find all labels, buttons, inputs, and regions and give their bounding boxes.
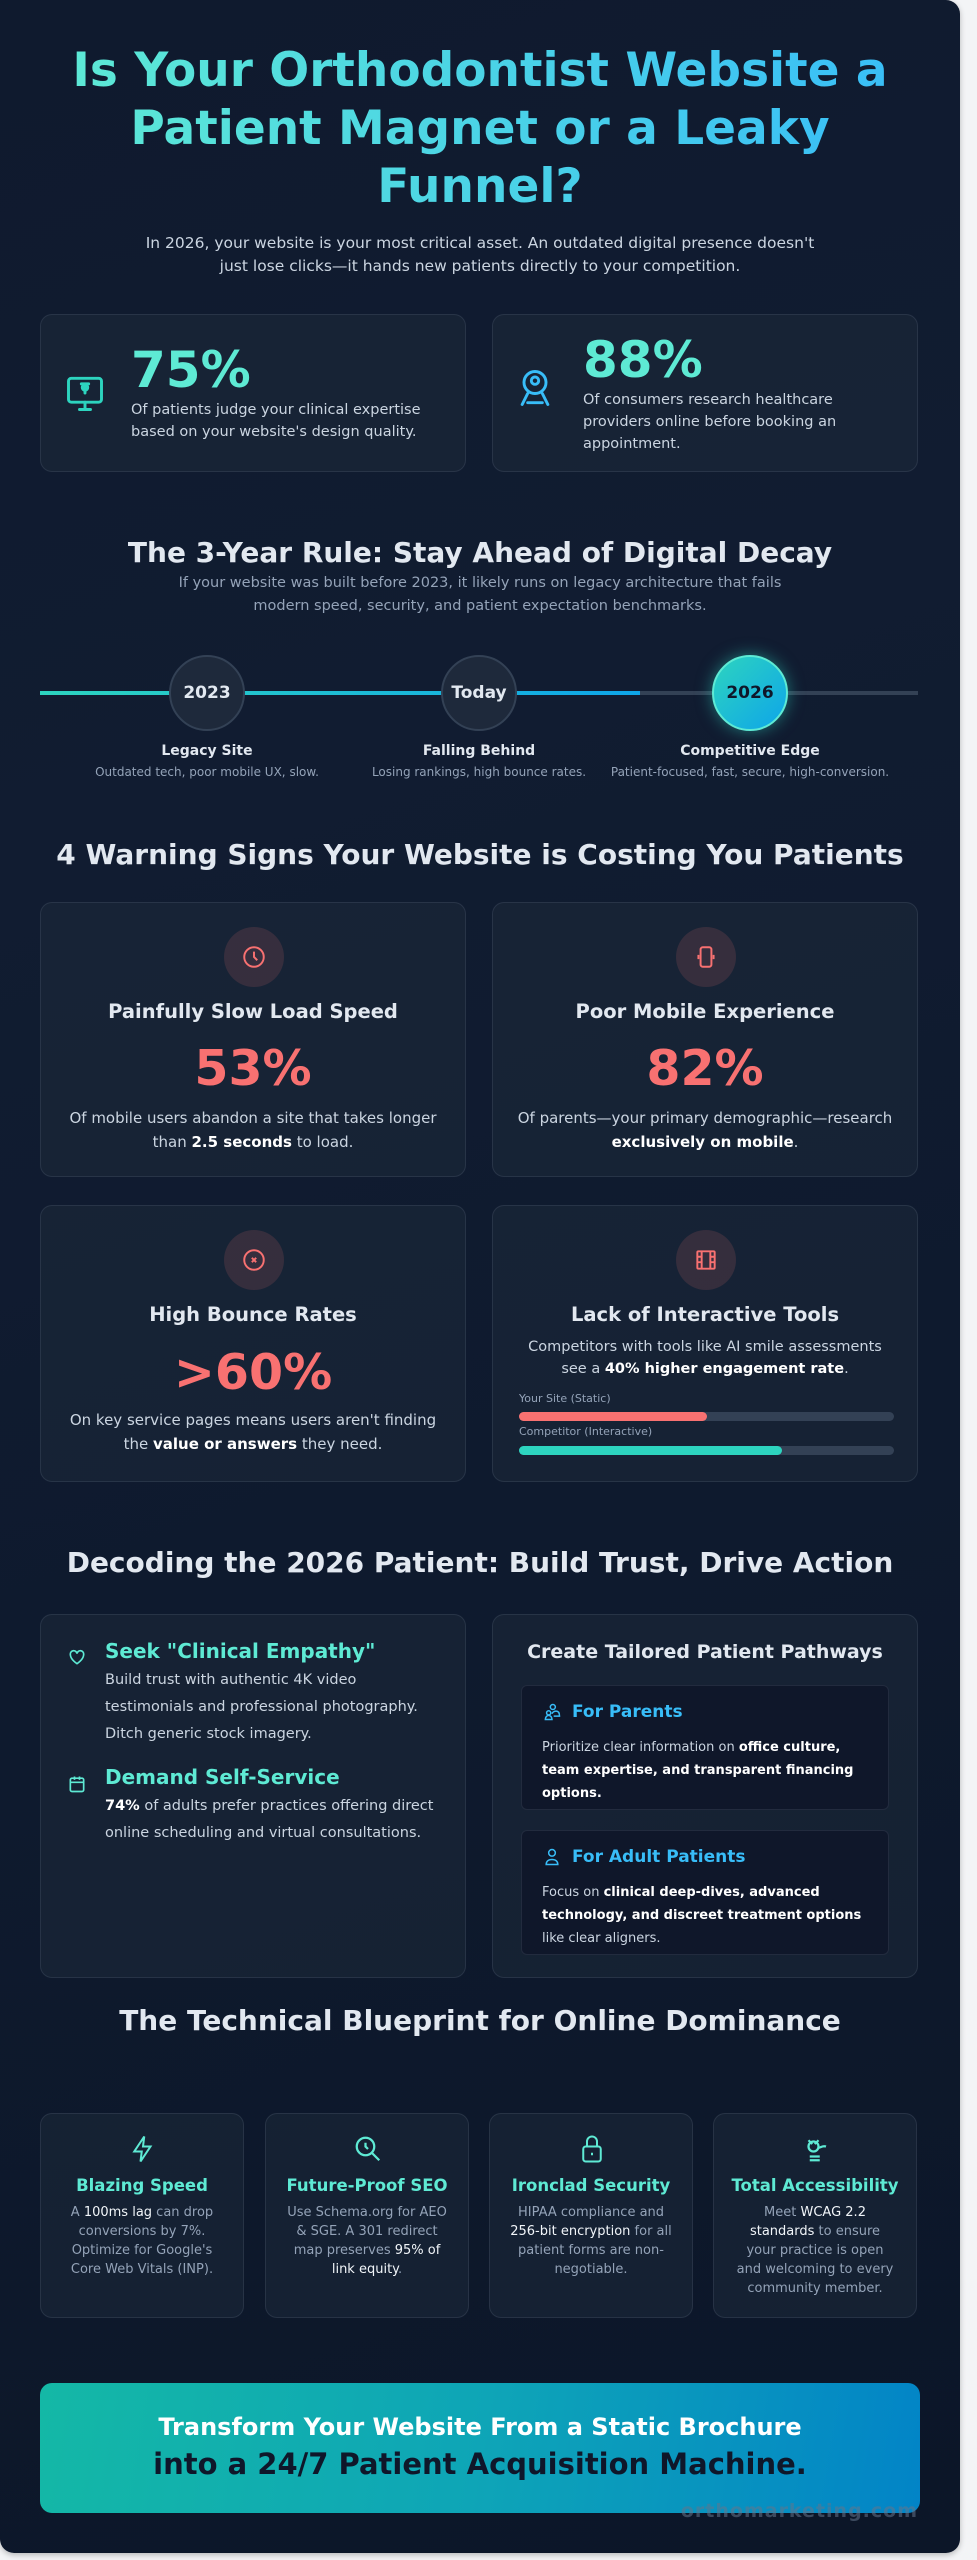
bar chart: Your Site (Static) xyxy=(519,1392,611,1405)
panel: pathways xyxy=(492,1614,918,1978)
clinical empathy: Seek "Clinical Empathy" xyxy=(105,1639,375,1663)
card: accessibility: Meet WCAG 2.2 standards to ensure your practice is open and welcoming to every community member. xyxy=(737,2205,893,2296)
stat text: 88% xyxy=(583,331,703,389)
stat text xyxy=(583,331,836,452)
label legacy xyxy=(95,743,319,779)
card: seo xyxy=(265,2113,469,2318)
clinical empathy: Build trust with authentic 4K video testimonials and professional photography. Ditch generic stock imagery. xyxy=(105,1672,418,1742)
subtitle: In 2026, your website is your most critical asset. An outdated digital presence doesn't just lose clicks—it hands new patients directly to your competition. xyxy=(146,234,814,275)
card: slow load xyxy=(40,902,466,1177)
for parents: Prioritize clear information on office culture, team expertise, and transparent financing options. xyxy=(542,1740,854,1801)
stat text: Of patients judge your clinical expertise based on your website's design quality. xyxy=(131,402,421,440)
heading: decoding: Decoding the 2026 Patient: Build Trust, Drive Action xyxy=(67,1546,893,1579)
panel: pathways: Create Tailored Patient Pathways xyxy=(527,1641,883,1663)
label falling: Losing rankings, high bounce rates. xyxy=(372,765,586,779)
card: accessibility: Total Accessibility xyxy=(731,2176,899,2195)
icon: monitor xyxy=(67,376,103,411)
card: speed xyxy=(40,2113,244,2318)
label falling: Falling Behind xyxy=(423,743,535,759)
icon: lock xyxy=(582,2136,602,2162)
card: slow load: 53% xyxy=(194,1040,312,1097)
for adults xyxy=(521,1830,889,1955)
self-service: 74% of adults prefer practices offering direct online scheduling and virtual consultations. xyxy=(105,1798,433,1841)
heading: warning signs: 4 Warning Signs Your Website is Costing You Patients xyxy=(56,838,904,871)
icon: clock xyxy=(224,927,284,987)
bar chart: Competitor (Interactive) xyxy=(519,1425,652,1438)
stat text: 75% xyxy=(131,341,251,399)
title: Is Your Orthodontist Website a Patient Magnet or a Leaky Funnel? xyxy=(72,43,888,214)
card: seo: Use Schema.org for AEO & SGE. A 301 redirect map preserves 95% of link equity. xyxy=(287,2205,447,2277)
card: bounce xyxy=(40,1205,466,1482)
heading: blueprint: The Technical Blueprint for Online Dominance xyxy=(119,2004,841,2037)
icon: film xyxy=(676,1230,736,1290)
text: 3-year rule: If your website was built before 2023, it likely runs on legacy architecture that fails modern speed, security, and patient expectation benchmarks. xyxy=(179,575,781,614)
node 2026: 2026 xyxy=(726,683,774,703)
node 2023: 2023 xyxy=(183,683,231,703)
cta banner xyxy=(40,2383,920,2513)
bar chart xyxy=(519,1392,894,1455)
card: speed: A 100ms lag can drop conversions by 7%. Optimize for Google's Core Web Vitals (INP). xyxy=(71,2205,213,2277)
label edge: Patient-focused, fast, secure, high-conversion. xyxy=(611,765,889,779)
cta banner: into a 24/7 Patient Acquisition Machine. xyxy=(153,2447,807,2481)
node 2026 xyxy=(712,655,788,731)
watermark: orthomarketing.com xyxy=(681,2500,918,2522)
stat card 88% xyxy=(492,314,918,472)
label edge xyxy=(611,743,889,779)
icon: search xyxy=(356,2136,380,2161)
for parents: For Parents xyxy=(572,1702,683,1722)
card: bounce: On key service pages means users aren't finding the value or answers they need. xyxy=(70,1411,436,1453)
card: interactive tools xyxy=(492,1205,918,1482)
card: slow load: Of mobile users abandon a site that takes longer than 2.5 seconds to load. xyxy=(69,1109,437,1151)
label legacy: Legacy Site xyxy=(161,743,253,759)
card: slow load: Painfully Slow Load Speed xyxy=(108,1000,398,1023)
icon: bolt xyxy=(132,2136,152,2162)
label falling xyxy=(372,743,586,779)
card: mobile: Of parents—your primary demographic—research exclusively on mobile. xyxy=(518,1109,892,1151)
node today xyxy=(441,655,517,731)
node today: Today xyxy=(451,683,507,703)
cta banner: Transform Your Website From a Static Brochure xyxy=(158,2413,802,2441)
icon: accessibility xyxy=(807,2140,826,2162)
self-service: Demand Self-Service xyxy=(105,1765,340,1789)
stat card 75% xyxy=(40,314,466,472)
timeline xyxy=(40,646,918,779)
stat text: Of consumers research healthcare providers online before booking an appointment. xyxy=(583,392,836,452)
card: security xyxy=(489,2113,693,2318)
card: mobile: Poor Mobile Experience xyxy=(576,1000,834,1023)
icon: phone xyxy=(676,927,736,987)
card: speed: Blazing Speed xyxy=(76,2176,208,2195)
card: security: Ironclad Security xyxy=(512,2176,670,2195)
card: security: HIPAA compliance and 256-bit encryption for all patient forms are non-negotiable. xyxy=(510,2205,672,2277)
label edge: Competitive Edge xyxy=(680,743,820,759)
heading: 3-year rule: The 3-Year Rule: Stay Ahead of Digital Decay xyxy=(128,536,832,569)
card: mobile: 82% xyxy=(646,1040,764,1097)
card: seo: Future-Proof SEO xyxy=(286,2176,448,2195)
self-service xyxy=(70,1765,434,1841)
for adults: Focus on clinical deep-dives, advanced technology, and discreet treatment options like clear aligners. xyxy=(542,1885,861,1946)
label legacy: Outdated tech, poor mobile UX, slow. xyxy=(95,765,319,779)
for parents xyxy=(521,1685,889,1810)
icon: search person xyxy=(520,370,550,406)
card: bounce: High Bounce Rates xyxy=(149,1303,357,1326)
icon: x circle xyxy=(224,1230,284,1290)
node 2023 xyxy=(169,655,245,731)
clinical empathy xyxy=(70,1639,418,1742)
card: accessibility xyxy=(713,2113,917,2318)
card: mobile xyxy=(492,902,918,1177)
card: interactive tools: Lack of Interactive Tools xyxy=(571,1303,839,1326)
card: bounce: >60% xyxy=(174,1344,332,1401)
for adults: For Adult Patients xyxy=(572,1847,746,1867)
card: interactive tools: Competitors with tools like AI smile assessments see a 40% higher engagement rate. xyxy=(528,1339,882,1377)
stat text xyxy=(131,341,421,440)
panel: trust xyxy=(40,1614,466,1978)
